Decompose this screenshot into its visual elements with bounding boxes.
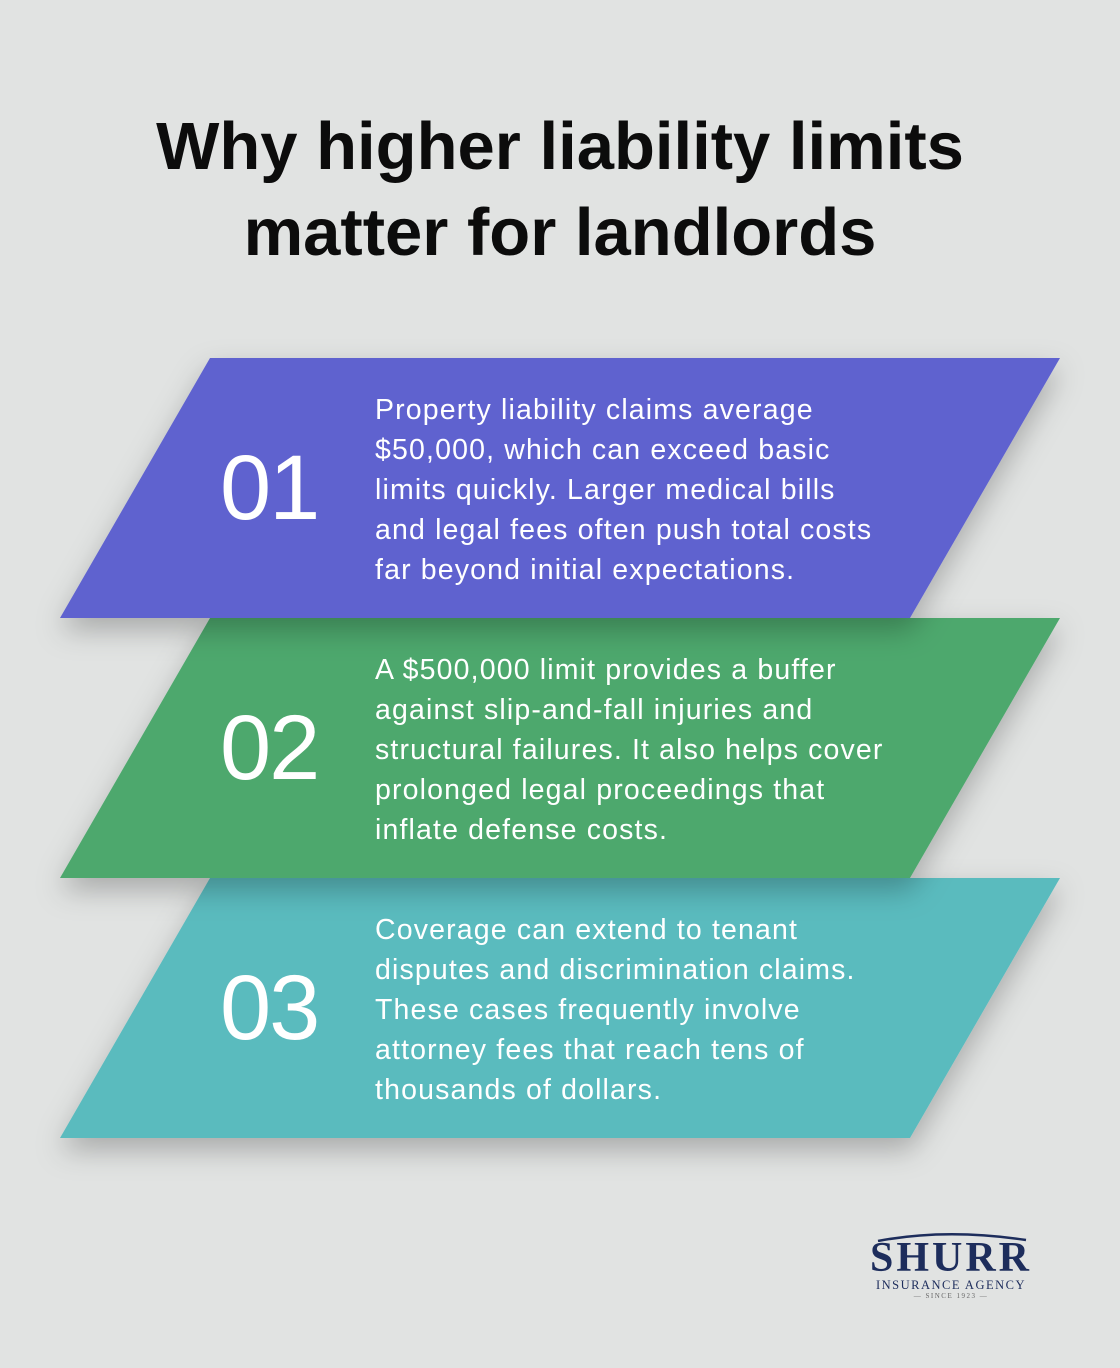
- text 01: [375, 394, 872, 586]
- text 02: against slip-and-fall injuries and: [375, 694, 813, 726]
- number 02: 02: [220, 697, 318, 799]
- text 01: far beyond initial expectations.: [375, 554, 795, 586]
- logo: INSURANCE AGENCY: [876, 1278, 1026, 1292]
- text 02: inflate defense costs.: [375, 814, 668, 846]
- text 03: [375, 914, 856, 1106]
- text 03: These cases frequently involve: [375, 994, 801, 1026]
- text 01: Property liability claims average: [375, 394, 814, 426]
- text 01: $50,000, which can exceed basic: [375, 434, 831, 466]
- panel: 02 background: [60, 618, 1060, 878]
- text 03: attorney fees that reach tens of: [375, 1034, 805, 1066]
- number 03: 03: [220, 957, 318, 1059]
- number 01: 01: [220, 437, 318, 539]
- panel: 03 background: [60, 878, 1060, 1138]
- text 02: prolonged legal proceedings that: [375, 774, 825, 806]
- text 02: structural failures. It also helps cover: [375, 734, 884, 766]
- logo: [870, 1233, 1032, 1300]
- text 02: [375, 654, 884, 846]
- title: matter for landlords: [244, 195, 876, 270]
- text 03: thousands of dollars.: [375, 1074, 662, 1106]
- title: Why higher liability limits: [156, 109, 964, 184]
- text 03: Coverage can extend to tenant: [375, 914, 798, 946]
- panel: 01 background: [60, 358, 1060, 618]
- text 02: A $500,000 limit provides a buffer: [375, 654, 837, 686]
- title: [156, 109, 964, 270]
- logo: SHURR: [870, 1235, 1032, 1281]
- text 03: disputes and discrimination claims.: [375, 954, 856, 986]
- text 01: and legal fees often push total costs: [375, 514, 872, 546]
- logo: — SINCE 1923 —: [914, 1292, 988, 1300]
- text 01: limits quickly. Larger medical bills: [375, 474, 836, 506]
